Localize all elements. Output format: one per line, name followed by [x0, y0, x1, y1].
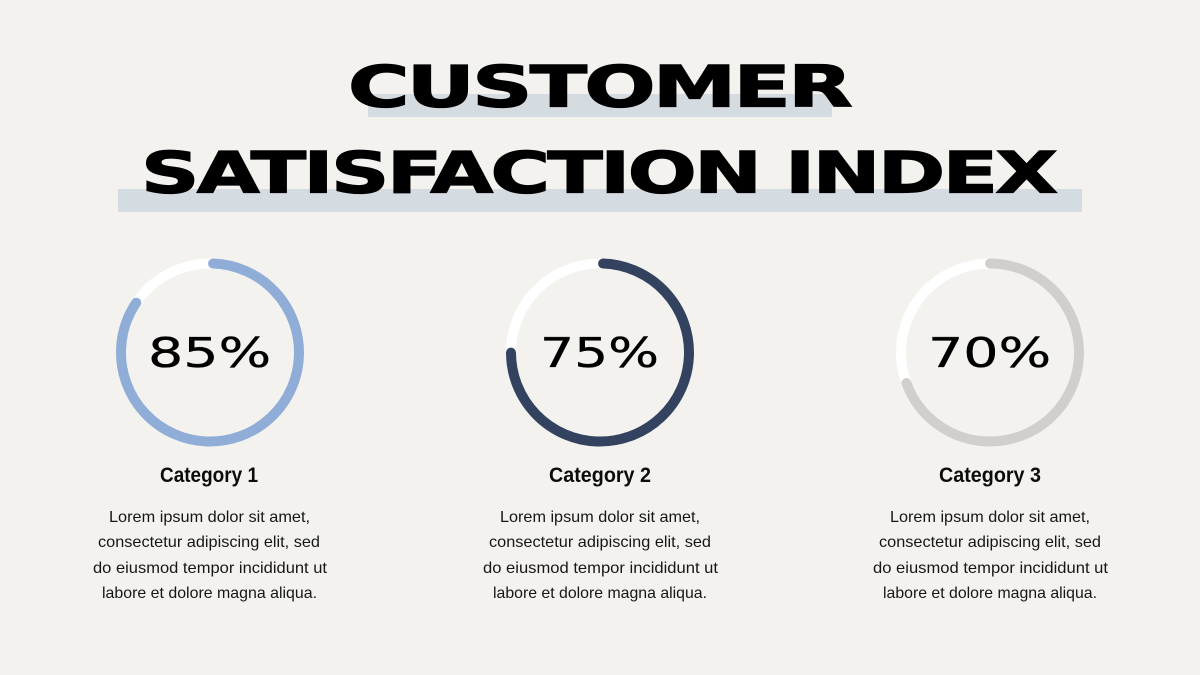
text block: category 3 description	[873, 509, 1109, 602]
title line 2: SATISFACTION INDEX	[141, 141, 1057, 206]
text block: category 1 description: labore et dolore magna aliqua.	[102, 585, 317, 602]
text block: category 1 description	[93, 509, 328, 602]
text block: category 2 description: Lorem ipsum dolor sit amet,	[500, 509, 700, 526]
title	[118, 54, 1082, 212]
donut chart: 85%	[118, 260, 302, 445]
text block: category 2 description: do eiusmod tempor incididunt ut	[483, 560, 719, 577]
text block: category 3 description: do eiusmod tempor incididunt ut	[873, 560, 1109, 577]
donut chart: 70%	[901, 264, 1079, 442]
text block: category 1 description: Lorem ipsum dolor sit amet,	[109, 509, 310, 526]
text block: category 2 description: labore et dolore magna aliqua.	[493, 585, 707, 602]
heading: category 1: Category 1	[160, 464, 258, 487]
title highlight bar: line 1	[368, 94, 832, 117]
heading: category 2: Category 2	[549, 464, 651, 487]
value: 70%: 70%	[928, 329, 1051, 377]
heading: category 3: Category 3	[939, 464, 1041, 487]
text block: category 3 description: labore et dolore magna aliqua.	[883, 585, 1097, 602]
value: 85%: 85%	[148, 329, 271, 377]
text block: category 2 description	[483, 509, 719, 602]
text block: category 1 description: do eiusmod tempor incididunt ut	[93, 560, 328, 577]
donut chart: 75%	[508, 260, 692, 445]
value: 75%: 75%	[540, 330, 659, 377]
text block: category 3 description: consectetur adipiscing elit, sed	[879, 534, 1101, 551]
text block: category 2 description: consectetur adipiscing elit, sed	[489, 534, 711, 551]
panel: category 2	[483, 260, 719, 602]
title highlight bar: line 2	[118, 189, 1082, 212]
text block: category 1 description: consectetur adipiscing elit, sed	[98, 534, 320, 551]
panel: category 1	[93, 260, 328, 602]
text block: category 3 description: Lorem ipsum dolor sit amet,	[890, 509, 1090, 526]
title line 1: CUSTOMER	[348, 54, 851, 120]
panel: category 3	[873, 264, 1109, 602]
